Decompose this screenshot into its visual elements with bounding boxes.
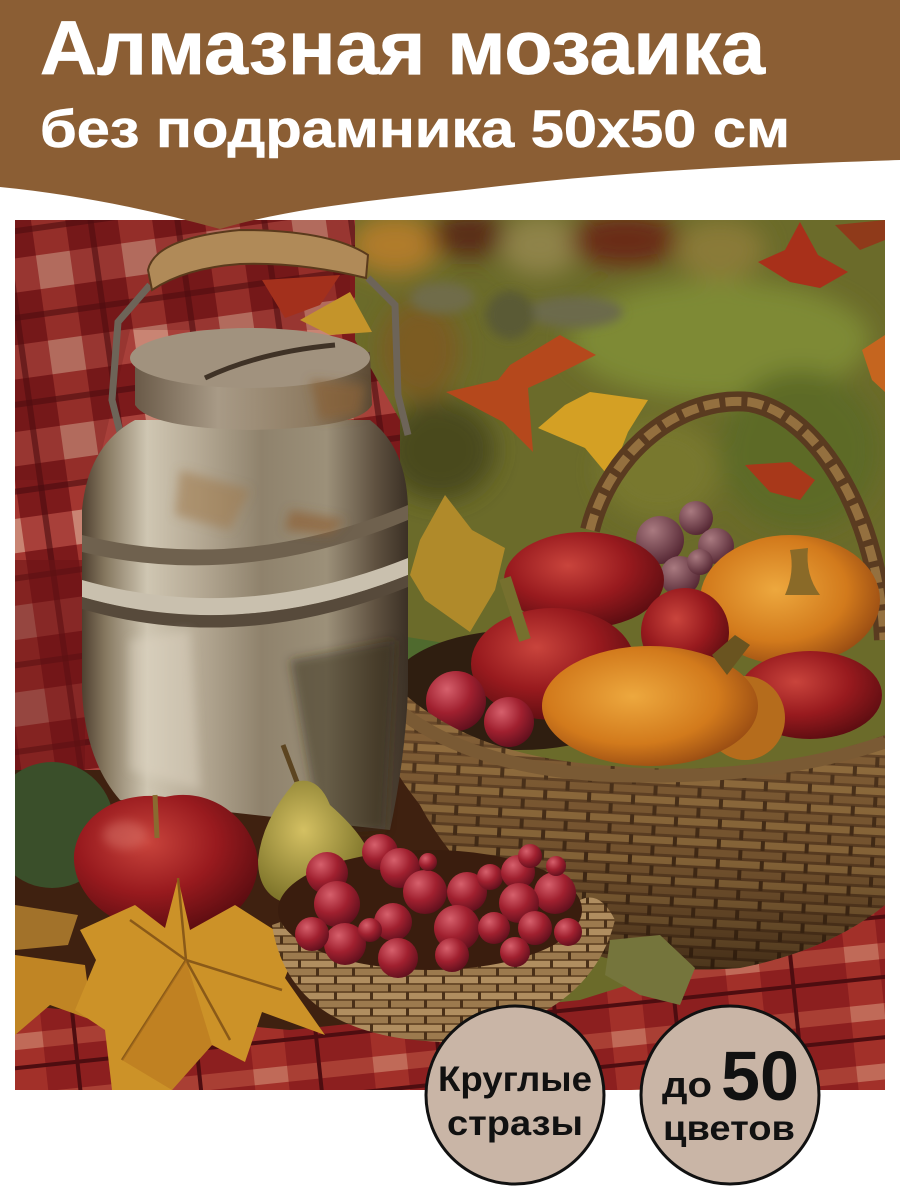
green leaf right [605,935,695,1005]
badge: round rhinestones [426,1006,604,1184]
pear [258,745,372,905]
apple middle [471,608,635,720]
painting: autumn still life [0,213,885,1090]
milk can handle [112,230,408,448]
milk can [82,328,408,835]
grapes [636,501,734,596]
plaid cloth left [15,220,400,800]
dark shadow ground [15,770,450,1030]
badge: round rhinestones: стразы [447,1104,583,1143]
berries [295,834,582,978]
apple stem [505,578,525,640]
apple top [504,532,664,628]
plaid cloth bottom [15,905,885,1090]
badge: up to 50 colours [641,1006,819,1184]
maple leaf front [15,878,325,1090]
badge: round rhinestones: Круглые [438,1060,592,1099]
badge: up to 50 colours: 50 [721,1037,799,1115]
apple small right [641,588,729,658]
basket handle [590,401,884,640]
subtitle: без подрамника 50х50 см [40,100,790,159]
small basket with berries [272,850,615,1042]
header banner [0,0,900,229]
large pumpkin [542,635,785,766]
autumn leaves background [262,220,885,690]
small red fruits [426,671,534,747]
foliage background [355,220,885,1002]
badge: up to 50 colours: до [662,1064,712,1105]
basket body [368,690,885,970]
title: Алмазная мозаика [40,6,766,91]
orange pumpkin right [700,535,880,665]
apple far right [738,651,882,739]
basket interior [408,632,568,750]
gourd [15,762,110,888]
badge: up to 50 colours: цветов [663,1109,795,1148]
red apple front [74,795,258,931]
